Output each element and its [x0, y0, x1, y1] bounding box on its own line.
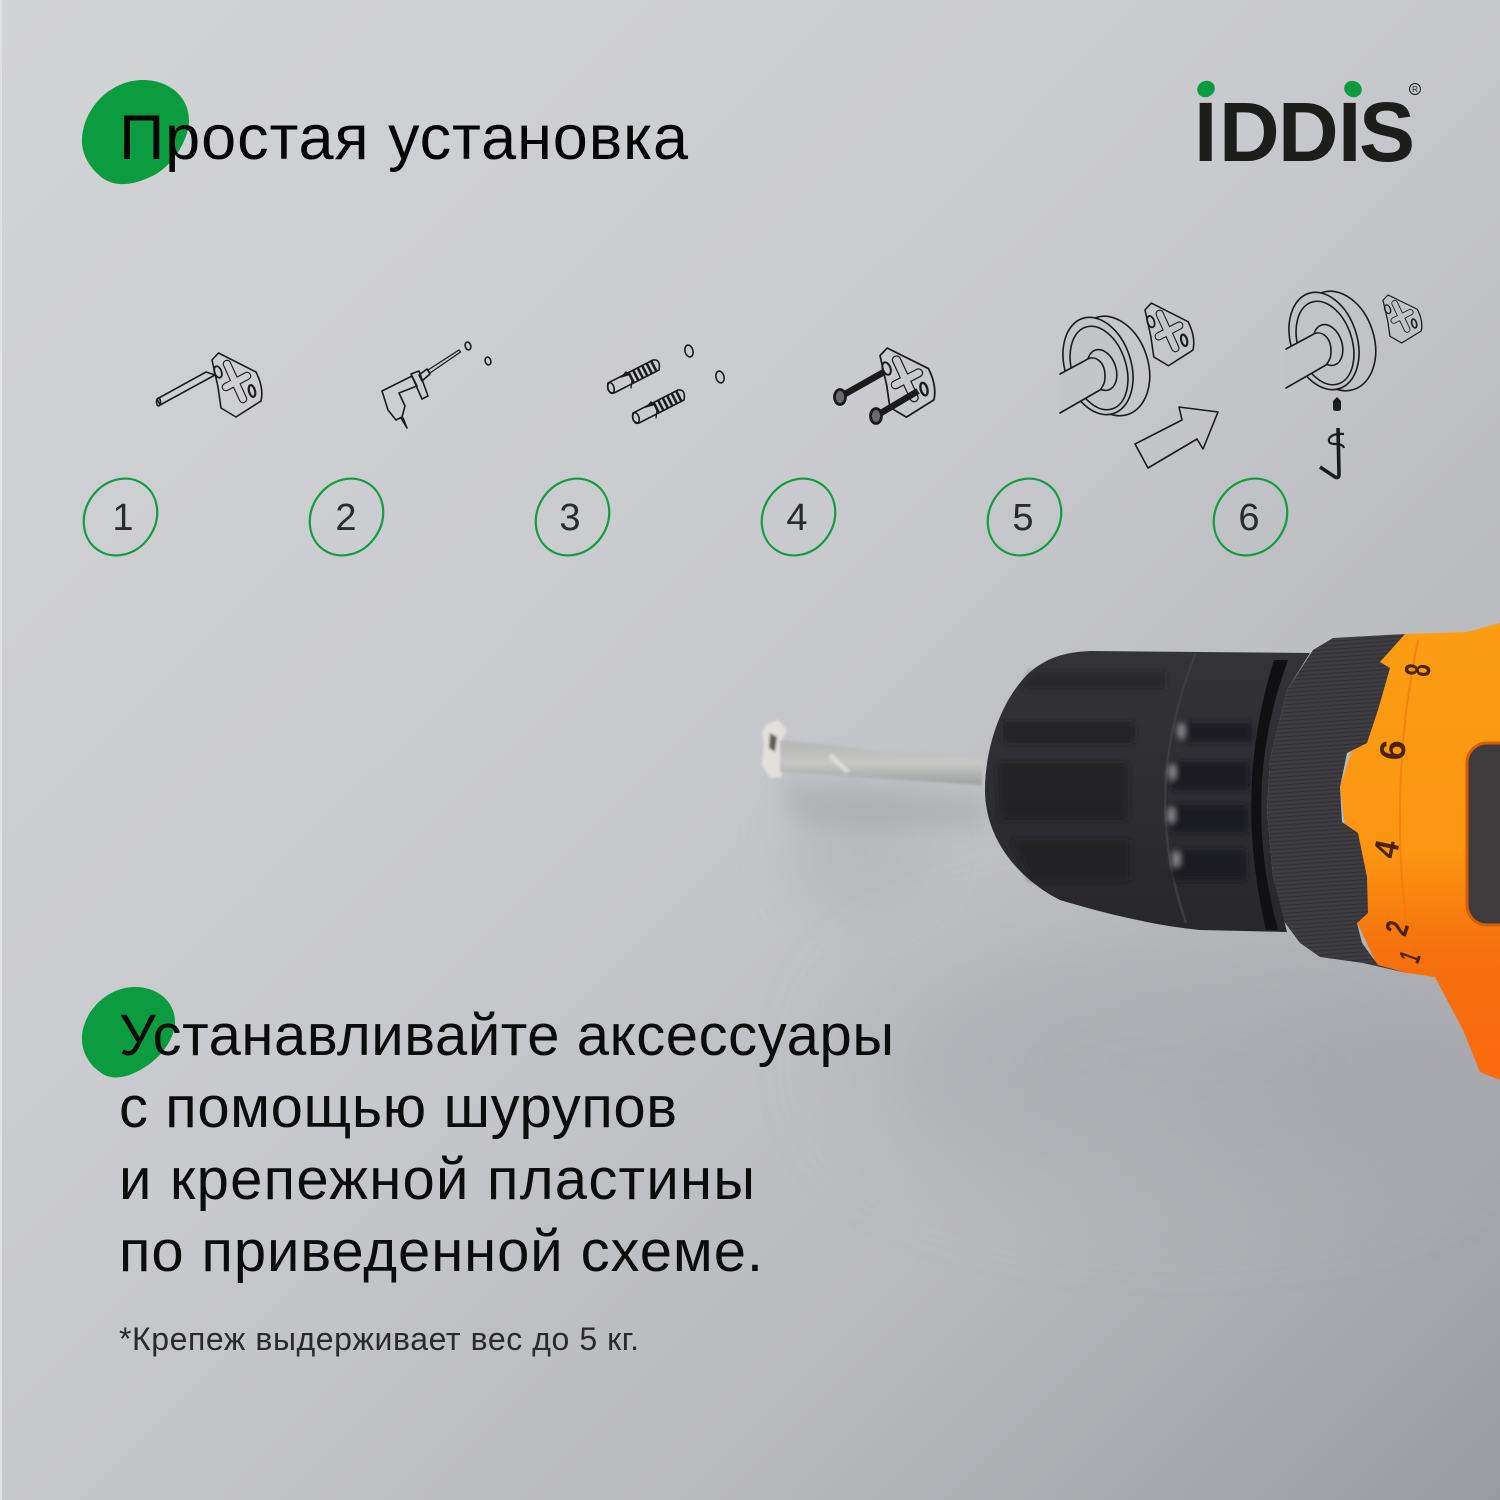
dial numbers: 8	[1398, 662, 1439, 678]
step marker 3: 3	[559, 497, 581, 539]
icon: arrow	[1135, 407, 1218, 468]
icon step 6: holder, set screw and hex key	[1277, 281, 1422, 478]
dial numbers: 2	[1378, 917, 1416, 939]
body text lines	[82, 987, 894, 1284]
step marker 2	[295, 464, 398, 570]
dial numbers: 4	[1366, 837, 1407, 861]
logo: IDDIS: IDDIS	[1194, 85, 1415, 179]
chuck	[985, 651, 1310, 932]
body paragraph: по приведенной схеме.	[119, 1219, 763, 1284]
icon step 3: wall plugs	[607, 344, 725, 424]
battery window	[1467, 743, 1500, 925]
drill body	[1340, 623, 1500, 1080]
body paragraph: и крепежной пластины	[119, 1147, 755, 1212]
body paragraph: с помощью шурупов	[119, 1075, 677, 1140]
dial numbers: 1	[1393, 947, 1428, 967]
drill photo	[762, 623, 1500, 1080]
logo: IDDIS: R	[1412, 85, 1418, 94]
step marker 5	[973, 464, 1076, 570]
body paragraph	[119, 1003, 894, 1284]
step marker 6: 6	[1238, 497, 1260, 539]
title: Простая установка	[119, 103, 689, 173]
icon step 1: plate with marker	[156, 353, 262, 417]
body text blob	[82, 987, 175, 1077]
icon step 5: holder flange and plate	[1051, 303, 1194, 426]
drill hole	[762, 720, 982, 785]
body paragraph: Устанавливайте аксессуары	[119, 1003, 894, 1068]
title blob	[82, 80, 189, 184]
step marker 2: 2	[335, 497, 357, 539]
step marker 4: 4	[786, 497, 808, 539]
dial numbers: 6	[1371, 738, 1414, 762]
step marker 1	[69, 464, 172, 570]
step marker 6	[1199, 464, 1302, 570]
step marker 5: 5	[1012, 497, 1034, 539]
step marker 3	[521, 464, 624, 570]
drill bit	[780, 740, 982, 785]
dial numbers	[1366, 662, 1439, 967]
footnote: *Крепеж выдерживает вес до 5 кг.	[119, 1321, 639, 1357]
icon step 2: drill	[382, 341, 492, 428]
step marker 4	[747, 464, 850, 570]
step marker 1: 1	[112, 497, 134, 539]
icon step 4: plate with screws	[834, 348, 935, 424]
torque collar	[1267, 634, 1407, 973]
drill bit shadow	[775, 780, 985, 830]
